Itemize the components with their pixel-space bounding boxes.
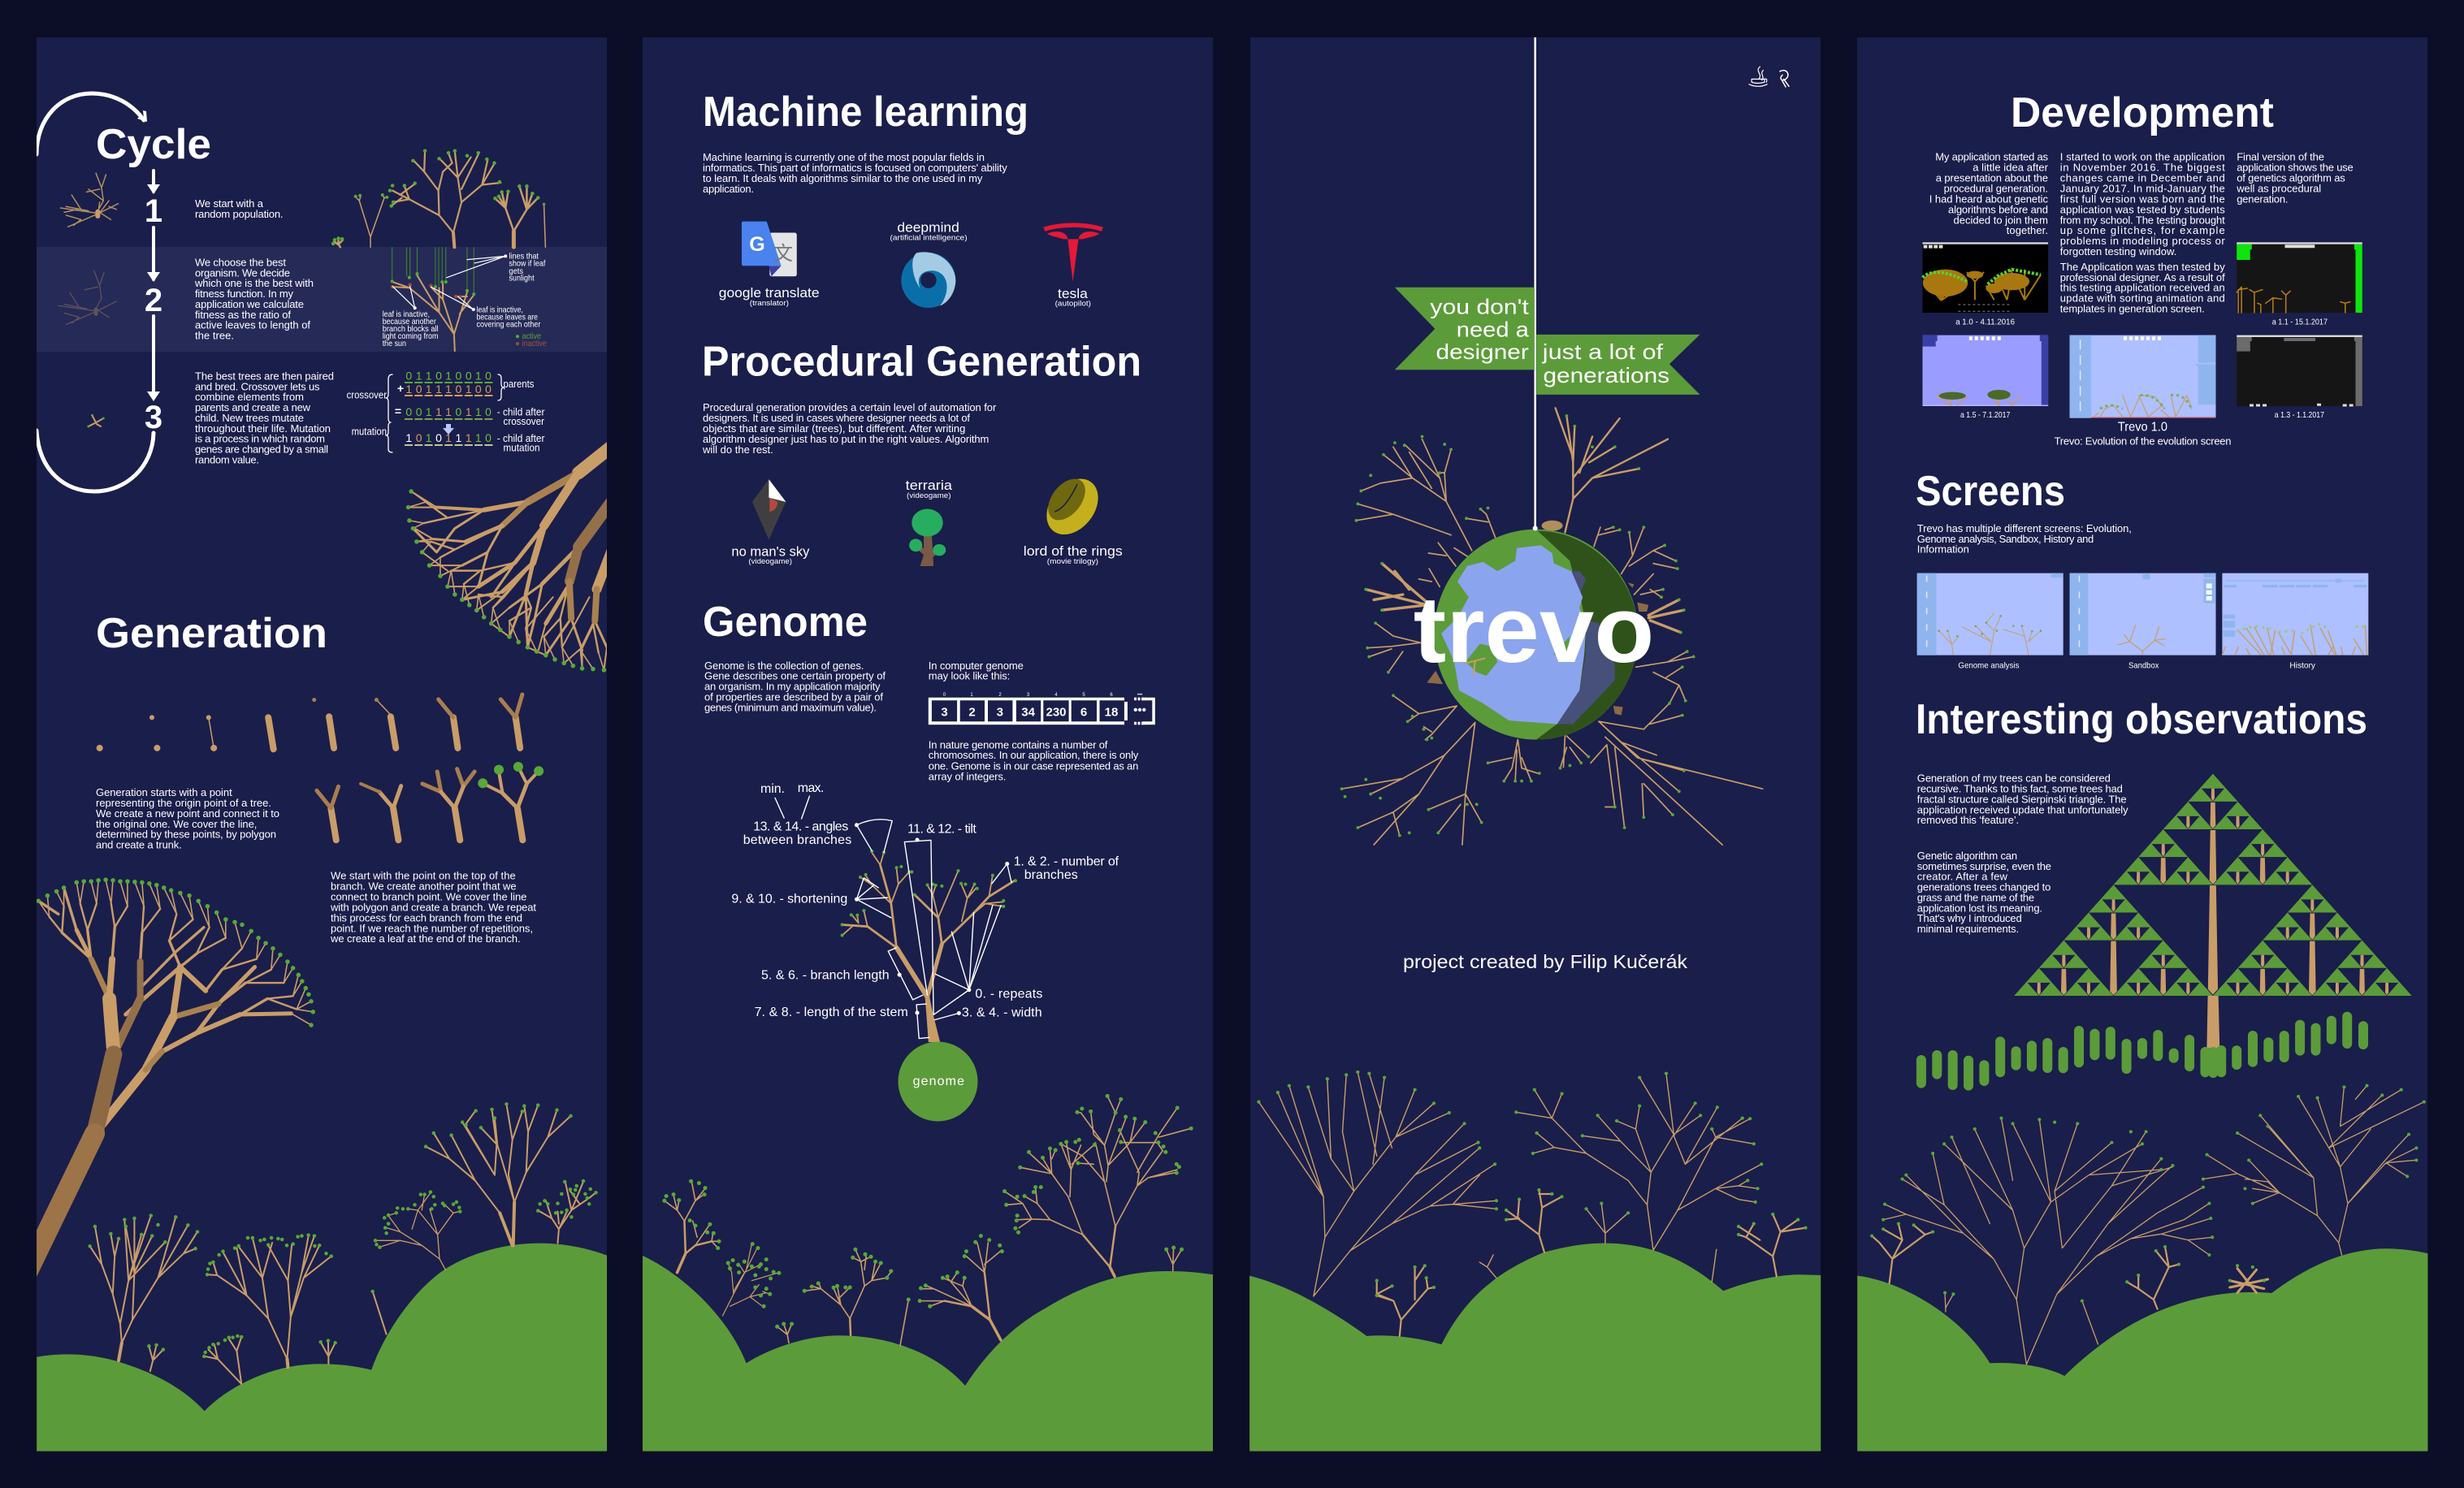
screenshot: sandbox (2070, 573, 2215, 655)
labels: genome tree: min. (760, 782, 785, 796)
text: step two: the tree. (195, 330, 234, 341)
diagram: crossover and mutation (347, 369, 544, 453)
text: step three: throughout their life. Mutation (195, 422, 331, 435)
text: genome definition: of properties are described by a pair of (704, 691, 883, 703)
screenshot labels: second row (1960, 410, 2324, 448)
banner: just a lot of generations: generations (1544, 363, 1669, 387)
text: machine learning: Machine learning is currently one of the most popular fields in (703, 151, 985, 163)
genome circle: genome (913, 1075, 964, 1088)
illustration: sierpinski tree (2014, 774, 2412, 1049)
heading: Screens: Screens (1916, 468, 2065, 515)
diagram: crossover and mutation: 1 (475, 431, 482, 444)
screenshot labels: screens (1958, 661, 2316, 671)
text: machine learning (703, 151, 1007, 195)
text: branch generation: connect to branch point. We cover the line (331, 891, 526, 903)
heading: Cycle: Cycle (96, 121, 211, 168)
illustration: planet (1427, 521, 1648, 740)
panel: cycle and generation (26, 37, 615, 1451)
text: sierpinski observation: recursive. Thanks to this fact, some trees had (1917, 782, 2123, 794)
text: genome definition (704, 660, 886, 713)
array: genome values: 18 (1105, 705, 1118, 719)
text: nature genome (929, 739, 1139, 782)
text: grass observation: Genetic algorithm can (1917, 850, 2017, 862)
text: branch generation: we create a leaf at the end of the branch. (330, 932, 521, 945)
panel: trevo title (1249, 37, 1821, 1451)
illustration: panel four ground trees (1872, 1086, 2424, 1365)
diagram: crossover and mutation: 1 (445, 431, 452, 444)
diagram: generation steps row one (100, 694, 522, 749)
labels: genome tree: max. (798, 781, 824, 795)
array: genome values: 3 (1027, 693, 1030, 698)
banner: just a lot of generations: just a lot of (1542, 340, 1664, 364)
callout labels: sunlight tree: covering each other (476, 320, 541, 330)
ground: panel four hills (1857, 1248, 2427, 1451)
diagram: crossover and mutation: 1 (466, 431, 472, 444)
title: trevo: trevo (1414, 577, 1654, 682)
text: development column two: up some glitches, for example (2060, 224, 2225, 236)
screenshot labels: screens: Genome analysis (1958, 661, 2020, 671)
text: branch generation (330, 870, 536, 945)
callout labels: sunlight tree: the sun (383, 339, 406, 348)
diagram: crossover and mutation: - child after (497, 406, 544, 417)
array: genome values: 6 (1080, 705, 1087, 719)
text: sierpinski observation (1917, 772, 2128, 826)
text: screens (1917, 522, 2132, 556)
array: genome values: 6 (1110, 693, 1113, 698)
text: procedural generation: algorithm designer just has to put in the right values. Algorithm (703, 433, 989, 445)
text: development column two: January 2017. In mid-January the (2060, 183, 2225, 195)
diagram: crossover and mutation: 0 (456, 405, 462, 418)
banner: you don't need a designer: need a (1457, 317, 1529, 341)
illustration: sunlight fitness tree (392, 247, 517, 351)
diagram: annotated genome tree (775, 796, 1015, 1042)
text: procedural generation: designers. It is used in cases where designer needs a lot of (703, 412, 970, 424)
text: development column three: generation. (2237, 192, 2288, 205)
text: step one: random population. (195, 208, 283, 220)
labels: genome tree: 13. & 14. - angles (753, 820, 848, 833)
text: step two: which one is the best with (194, 277, 314, 289)
step numbers (145, 193, 162, 435)
heading: Machine learning: Machine learning (703, 89, 1028, 136)
diagram: crossover and mutation: 011010010 (405, 369, 492, 382)
text: step two (194, 257, 314, 341)
text: nature genome: array of integers. (929, 770, 1006, 782)
screenshot labels: second row: Trevo: Evolution of the evolution screen (2055, 435, 2231, 448)
diagram: crossover and mutation: = (395, 404, 401, 417)
callout labels: sunlight tree: because leaves are (476, 313, 538, 322)
text: branch generation: this process for each branch from the end (331, 911, 522, 924)
text: step two: fitness as the ratio of (195, 309, 291, 321)
diagram: crossover and mutation: 1 (405, 431, 412, 444)
label: deepmind: (artificial intelligence) (890, 234, 968, 243)
array: genome values: ••• (1137, 693, 1142, 698)
diagram: crossover and mutation: mutation (352, 426, 387, 438)
callout labels: sunlight tree: leaf is inactive, (383, 309, 430, 319)
heading: Procedural Generation: Procedural Generation (702, 338, 1141, 385)
text: genome definition: genes (minimum and maximum value). (704, 701, 877, 713)
banner: you don't need a designer: you don't (1430, 294, 1530, 318)
text: development column two: I started to work on the application (2060, 151, 2225, 163)
text: development column two: in November 2016. The biggest (2060, 162, 2225, 174)
callout labels: sunlight tree: light coming from (383, 331, 439, 341)
text: nature genome: one. Genome is in our case represented as an (929, 759, 1138, 772)
text: development column three: application shows the use (2237, 162, 2354, 174)
screenshot: history (2222, 573, 2368, 655)
diagram: crossover and mutation: 1 (456, 431, 462, 444)
illustration: big fan tree (26, 880, 313, 1276)
screenshot: alpha 1.5 (1922, 335, 2048, 406)
diagram: crossover and mutation: crossover (504, 416, 544, 427)
text: step three: The best trees are then paired (195, 370, 334, 382)
callout labels: sunlight tree (383, 252, 547, 348)
text: step three: child. New trees mutate (195, 412, 304, 424)
heading: Development: Development (2011, 89, 2274, 136)
text: step three: combine elements from (195, 391, 304, 403)
genome circle (899, 1041, 978, 1121)
text: step three (195, 370, 334, 465)
callout labels: sunlight tree: lines that (509, 252, 539, 262)
text: trunk generation: representing the origin point of a tree. (96, 797, 271, 809)
screenshot: alpha 1.1 (2237, 242, 2362, 313)
screenshot labels: first row: a 1.1 - 15.1.2017 (2272, 317, 2328, 327)
text: step two: application we calculate (195, 298, 304, 310)
label: terraria: (videogame) (907, 491, 951, 500)
text: sierpinski observation: fractal structure called Sierpinski triangle. The (1917, 793, 2127, 805)
array: genome values: 1 (970, 693, 973, 698)
text: development column three: well as procedural (2236, 183, 2321, 195)
text: development column three: of genetics algorithm as (2237, 172, 2345, 184)
label: no man's sky: (videogame) (748, 557, 792, 566)
label: tesla (1055, 286, 1091, 309)
label: google translate: (translator) (750, 299, 789, 308)
illustration: trees around planet (1342, 408, 1763, 845)
text: development column two: The Application was then tested by (2060, 261, 2225, 273)
label: deepmind: deepmind (897, 220, 959, 236)
text: step three: and bred. Crossover lets us (195, 380, 320, 392)
diagram: crossover and mutation: 1 (466, 405, 472, 418)
array: genome values (929, 693, 1155, 727)
screenshot labels: second row: a 1.3 - 1.1.2017 (2275, 410, 2324, 420)
text: development column three: Final version of the (2237, 151, 2324, 163)
callout labels: sunlight tree: leaf is inactive, (476, 305, 523, 315)
diagram: crossover and mutation: 0 (435, 431, 442, 444)
banner: just a lot of generations (1536, 335, 1700, 395)
text: step three: random value. (195, 453, 259, 465)
icon: faded selection tree (58, 271, 116, 325)
array: genome values: 2 (968, 705, 976, 719)
screenshot labels: second row: a 1.5 - 7.1.2017 (1960, 410, 2011, 420)
callout labels: sunlight tree: because another (383, 317, 436, 327)
text: grass observation: grass and the name of the (1917, 892, 2034, 904)
text: development column two: templates in generation screen. (2060, 303, 2205, 315)
banner: you don't need a designer: designer (1436, 340, 1529, 364)
callout labels: sunlight tree: inactive (522, 339, 547, 348)
text: development column one: My application started as (1935, 151, 2049, 163)
icon: tesla (1043, 223, 1103, 282)
text: development column two: from my school. The testing brought (2060, 214, 2225, 226)
array: genome values: 3 (997, 705, 1003, 719)
text: development column two (2060, 151, 2225, 315)
text: procedural generation (702, 401, 997, 456)
label: terraria: terraria (906, 478, 952, 493)
text: sierpinski observation: application received update that unfortunately (1917, 803, 2128, 815)
labels: genome tree: 11. & 12. - tilt (907, 823, 977, 837)
diagram: crossover and mutation: 0 (405, 405, 412, 418)
step numbers: 3 (145, 400, 162, 435)
icon: deepmind (901, 252, 955, 308)
callout labels: sunlight tree: show if leaf (509, 258, 545, 268)
text: grass observation: minimal requirements. (1917, 923, 2019, 935)
screenshot labels: first row (1955, 317, 2328, 327)
text: procedural generation: objects that are similar (trees), but different. After writing (703, 422, 965, 435)
illustration: panel two ground trees (665, 1096, 1191, 1346)
text: nature genome: chromosomes. In our application, there is only (929, 749, 1139, 761)
text: trunk generation (96, 786, 279, 851)
text: step three: genes are changed by a small (195, 443, 328, 455)
text: genome definition: Gene describes one certain property of (704, 670, 886, 682)
diagram: crossover and mutation: - child after (497, 433, 544, 444)
text: development column two: first full version was born and the (2060, 192, 2225, 205)
text: machine learning: to learn. It deals with algorithms similar to the one used in my (703, 172, 983, 184)
array: genome values: 4 (1054, 693, 1058, 698)
text: development column one (1929, 151, 2049, 236)
diagram: crossover and mutation: parents (504, 378, 535, 390)
text: development column one: algorithms before and (1948, 203, 2048, 215)
label: tesla: tesla (1058, 286, 1088, 301)
text: development column two: application was tested by students (2060, 203, 2225, 215)
text: step one: We start with a (195, 197, 264, 210)
screenshot labels: first row: a 1.0 - 4.11.2016 (1955, 317, 2015, 327)
icon: no man's sky (752, 479, 786, 540)
heading: Generation: Generation (96, 610, 327, 657)
text: screens: Information (1917, 543, 1969, 556)
text: step two: fitness function. In my (195, 288, 294, 300)
diagram: crossover and mutation: 1 (426, 405, 432, 418)
screenshot labels: second row: Trevo 1.0 (2118, 421, 2167, 435)
text: procedural generation: will do the rest. (702, 443, 773, 456)
illustration: corner fan tree (409, 444, 615, 670)
icon: google translate: 文 (773, 243, 793, 265)
labels: genome tree: 1. & 2. - number of (1014, 855, 1119, 869)
icon: google translate: G (749, 233, 765, 256)
text: step one (195, 197, 283, 220)
label: lord of the rings: lord of the rings (1024, 543, 1123, 559)
labels: genome tree: branches (1024, 868, 1078, 882)
screenshot labels: screens: History (2289, 661, 2316, 671)
text: sierpinski observation: Generation of my trees can be considered (1917, 772, 2111, 784)
diagram: crossover and mutation: 0 (416, 405, 422, 418)
text: development column two: this testing application received an (2060, 282, 2225, 294)
screenshot: alpha 1.3 (2237, 335, 2362, 406)
text: trunk generation: We create a new point and connect it to (96, 807, 279, 820)
text: genome definition: an organism. In my application majority (704, 681, 881, 693)
heading: Interesting observations: Interesting observations (1916, 696, 2367, 743)
diagram: crossover and mutation: mutation (504, 442, 540, 453)
array: genome values: 5 (1082, 693, 1085, 698)
diagram: crossover and mutation: crossover (347, 390, 387, 401)
labels: genome tree: between branches (743, 833, 851, 847)
text: development column one: I had heard about genetic (1929, 192, 2049, 205)
labels: genome tree: 9. & 10. - shortening (731, 893, 847, 906)
array: genome values: 34 (1021, 705, 1036, 719)
text: step two: organism. We decide (195, 266, 290, 279)
text: genome definition: Genome is the collection of genes. (704, 660, 864, 672)
diagram: crossover and mutation: 0 (416, 431, 422, 444)
text: development column three (2236, 151, 2354, 205)
text: grass observation (1917, 850, 2051, 935)
text: development column one: procedural generation. (1944, 183, 2048, 195)
illustration: grass bars (1921, 1017, 2363, 1086)
labels: genome tree: 0. - repeats (975, 987, 1042, 1001)
diagram: crossover and mutation: 101110100 (405, 383, 492, 396)
icon: google translate (742, 222, 797, 276)
text: development column two: changes came in December and (2060, 172, 2225, 184)
labels: genome tree (731, 781, 1119, 1020)
array: genome values: 3 (941, 705, 948, 719)
diagram: crossover and mutation: 1 (426, 431, 432, 444)
illustration: panel three ground trees (1258, 1072, 1806, 1336)
text: development column one: a presentation about the (1936, 172, 2048, 184)
text: nature genome: In nature genome contains a number of (929, 739, 1108, 751)
text: step two: active leaves to length of (195, 319, 310, 331)
labels: genome tree: 3. & 4. - width (962, 1006, 1042, 1020)
text: branch generation: point. If we reach the number of repetitions, (331, 922, 533, 934)
label: google translate (719, 285, 819, 308)
heading: Genome: Genome (703, 599, 868, 646)
label: google translate: google translate (719, 285, 819, 301)
array: genome values: 0 (943, 693, 946, 698)
text: step two: We choose the best (195, 257, 286, 268)
callout labels: sunlight tree: active (522, 331, 541, 341)
diagram: crossover and mutation: 0 (485, 405, 492, 418)
text: grass observation: creator. After a few (1917, 871, 2008, 883)
text: trunk generation: Generation starts with a point (96, 786, 232, 798)
text: branch generation: We start with the point on the top of the (331, 870, 516, 882)
ground: panel three hills (1249, 1244, 1821, 1451)
diagram: crossover and mutation: 1 (435, 405, 442, 418)
text: trunk generation: and create a trunk. (96, 839, 182, 851)
text: development column two: problems in modeling process or (2060, 235, 2225, 247)
text: development column two: professional designer. As a result of (2060, 271, 2225, 283)
icon: small bred tree (89, 415, 103, 426)
text: machine learning: informatics. This part of informatics is focused on computers' ability (703, 162, 1007, 174)
text: trunk generation: the original one. We cover the line, (96, 818, 257, 830)
text: procedural generation: Procedural generation provides a certain level of automation for (703, 401, 997, 413)
label: no man's sky: no man's sky (731, 543, 810, 559)
text: grass observation: application lost its meaning. (1917, 902, 2042, 915)
text: computer genome (929, 660, 1024, 682)
diagram: crossover and mutation: 1 (475, 405, 482, 418)
callout labels: sunlight tree: branch blocks all (383, 324, 439, 334)
labels: genome tree: 7. & 8. - length of the stem (755, 1006, 908, 1019)
array: genome values: 2 (998, 693, 1002, 698)
text: development column two: forgotten testing window. (2060, 245, 2176, 257)
ground: panel one hills (37, 1244, 607, 1451)
diagram: crossover and mutation: + (397, 382, 404, 395)
text: step three: is a process in which random (195, 433, 325, 445)
text: screens: Genome analysis, Sandbox, History and (1917, 533, 2094, 545)
text: development column one: decided to join them (1953, 214, 2048, 226)
text: screens: Trevo has multiple different screens: Evolution, (1917, 522, 2132, 534)
text: development column one: a little idea after (1972, 162, 2049, 174)
illustration: panel one ground trees (90, 1104, 596, 1384)
panel: development, screens, observations (1857, 37, 2427, 1451)
text: development column two: update with sorting animation and (2060, 292, 2225, 305)
diagram: crossover and mutation: 1 (445, 405, 452, 418)
array: genome values: 230 (1046, 705, 1067, 719)
label: lord of the rings: (movie trilogy) (1047, 557, 1098, 566)
icon: terraria tree (909, 509, 946, 566)
credit line: project created by Filip Kučerák (1403, 951, 1688, 972)
text: grass observation: That's why I introduced (1917, 912, 2022, 924)
label: tesla: (autopilot) (1055, 300, 1091, 309)
label: lord of the rings (1024, 543, 1123, 566)
text: branch generation: branch. We create another point that we (331, 880, 517, 893)
text: step three: parents and create a new (195, 401, 311, 413)
labels: genome tree: 5. & 6. - branch length (761, 968, 890, 982)
screenshot: genome analysis (1917, 573, 2063, 655)
text: branch generation: with polygon and create a branch. We repeat (330, 901, 536, 913)
callout labels: sunlight tree: sunlight (509, 274, 535, 283)
label: no man's sky (731, 543, 810, 566)
screenshot labels: screens: Sandbox (2128, 661, 2159, 671)
text: grass observation: generations trees changed to (1917, 881, 2050, 893)
hanging line (1534, 37, 1536, 528)
icons: java and tool logo (1749, 67, 1789, 87)
icon: random population tree (60, 173, 119, 227)
label: deepmind (890, 220, 968, 243)
cycle loop arrows (37, 93, 160, 491)
banner: you don't need a designer (1395, 288, 1535, 370)
illustration: random population trees (333, 151, 545, 247)
array: genome values: ••• (1133, 703, 1146, 717)
label: terraria (906, 478, 952, 500)
icon: one ring (1036, 469, 1109, 544)
callout labels: sunlight tree: gets (509, 266, 523, 276)
text: machine learning: application. (703, 183, 754, 195)
text: grass observation: sometimes surprise, even the (1917, 860, 2051, 872)
panel: machine learning, procedural generation, genome (643, 37, 1213, 1451)
screenshot: trevo 1.0 (2070, 335, 2215, 418)
text: sierpinski observation: removed this ‘feature’. (1917, 814, 2019, 826)
text: computer genome: In computer genome (929, 660, 1024, 672)
screenshot: alpha 1.0 (1922, 242, 2048, 313)
step numbers: 2 (145, 283, 162, 318)
text: trunk generation: determined by these points, by polygon (96, 828, 276, 841)
diagram: generation steps row two (317, 767, 539, 840)
ground: panel two hills (643, 1256, 1213, 1451)
step numbers: 1 (145, 193, 162, 229)
diagram: crossover and mutation: 0 (485, 431, 492, 444)
text: development column one: together. (2007, 224, 2048, 236)
text: computer genome: may look like this: (929, 670, 1010, 682)
